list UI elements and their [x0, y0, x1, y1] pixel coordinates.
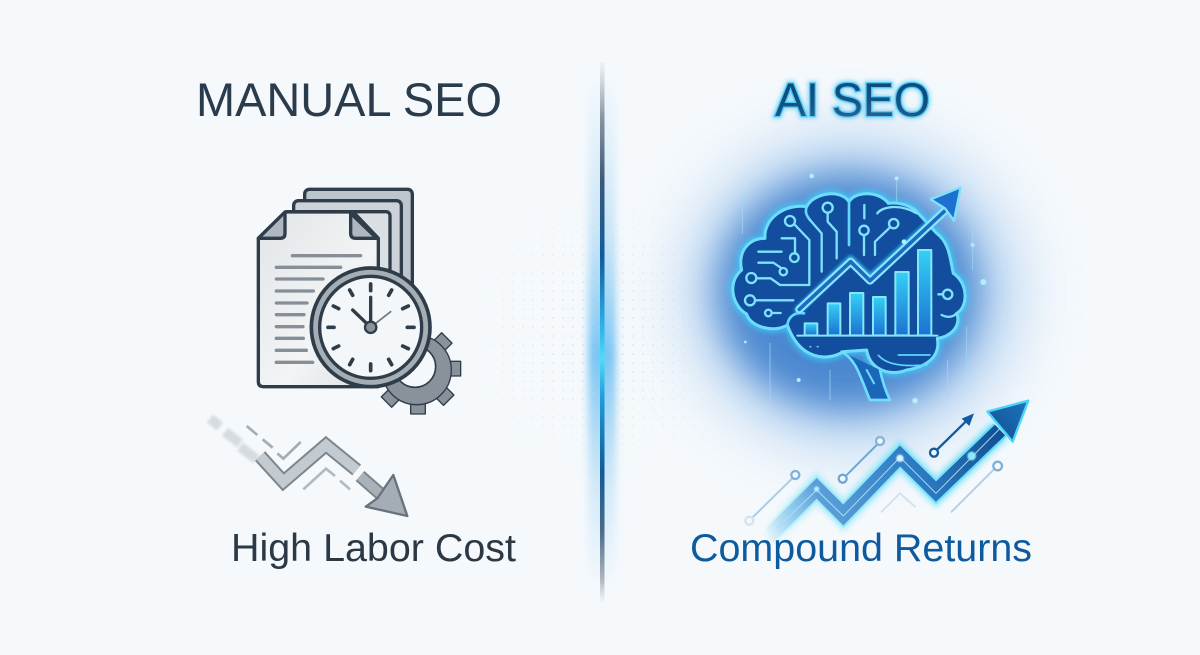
- divider line: [588, 62, 616, 602]
- arrow: declining zigzag: [210, 418, 407, 516]
- inner lobes: [787, 202, 849, 325]
- icon: documents with clock and gear: [258, 189, 461, 414]
- heading: AI SEO: AI SEO: [775, 73, 930, 126]
- document text lines: [276, 256, 361, 362]
- brain glow: [733, 194, 965, 372]
- bar chart: [797, 250, 937, 366]
- label: High Labor Cost: High Labor Cost: [231, 527, 516, 570]
- icon: gear: [381, 333, 461, 414]
- heading: AI SEO: AI SEO: [775, 73, 930, 126]
- heading: Manual SEO: MANUAL SEO: [196, 73, 502, 126]
- arrowhead: [987, 401, 1028, 442]
- growth arrow: [798, 187, 961, 310]
- sparks: [896, 455, 904, 462]
- icon: clock: [311, 268, 430, 387]
- arrow: rising zigzag with nodes: [745, 398, 1028, 538]
- brain outline: [733, 194, 965, 372]
- glow halo behind brain: [687, 137, 1017, 447]
- label: Compound Returns: Compound Returns: [690, 527, 1032, 570]
- icon: stacked back sheets: [283, 189, 412, 345]
- icon: front document: [258, 212, 378, 387]
- main zigzag glow: [767, 430, 1000, 538]
- glow particles: [744, 174, 986, 382]
- node lines: [745, 413, 1002, 525]
- icon: glowing brain with chart: [733, 174, 986, 400]
- brain stem: [842, 352, 890, 400]
- circuit traces: [745, 203, 957, 317]
